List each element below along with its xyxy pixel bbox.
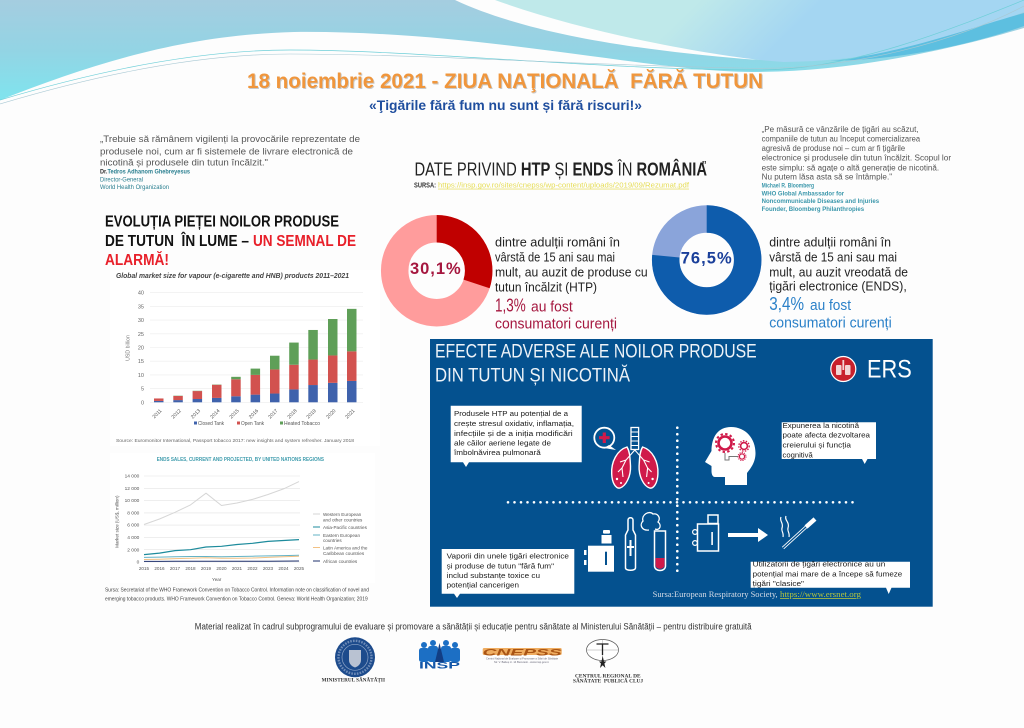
bar chart: global market size: 40 — [138, 291, 144, 297]
line chart: ENDS sales by region: 0 — [137, 560, 140, 566]
callout: HTP risks: crește stresul oxidativ, inflamația, — [454, 419, 574, 428]
text: HTP statistic: au fost — [531, 300, 573, 316]
line chart: ENDS sales by region: 2022 — [247, 566, 258, 571]
line chart: ENDS sales by region: 2020 — [216, 566, 227, 571]
quote: Tedros Ghebreyesus: produsele noi, cum ar fi sistemele de livrare electronică de — [100, 146, 353, 158]
callout: nicotine and the brain: cognitivă — [782, 450, 814, 459]
callout: HTP risks: infecțiile și de a iniția modificări — [454, 429, 573, 438]
text: HTP statistic: vârstă de 15 ani sau mai — [495, 249, 615, 264]
quote: Michael Bloomberg: este simplu: să agațe o altă generație de nicotină. — [762, 163, 939, 172]
line chart: ENDS sales by region: 2025 — [294, 566, 305, 571]
callout: HTP risks: Produsele HTP au potențial de a — [454, 409, 569, 418]
line chart: ENDS sales by region: 2021 — [232, 566, 243, 571]
bar chart: global market size: Closed Tank — [198, 421, 224, 427]
heading: market evolution: EVOLUȚIA PIEȚEI NOILOR PRODUSE — [105, 214, 339, 231]
quote: Michael Bloomberg — [762, 125, 952, 213]
subtitle: «Ţigările fără fum nu sunt și fără riscuri!» — [369, 97, 642, 113]
text: HTP statistic: consumatori curenți — [495, 316, 617, 332]
heading: market evolution: UN SEMNAL DE — [253, 233, 356, 250]
callout: toxic vapours: și produse de tutun "fără fum" — [447, 561, 554, 570]
heading: market evolution: DE TUTUN ÎN LUME – — [105, 232, 249, 250]
bar chart: global market size: Open Tank — [241, 421, 264, 427]
dotted dividers — [508, 428, 853, 575]
source line: https://www.ersnet.org — [780, 590, 861, 599]
quote: Michael Bloomberg: agresivă de produse noi – cum ar fi țigările — [762, 144, 905, 153]
line chart: ENDS sales by region: ENDS SALES, CURRENT AND PROJECTED, BY UNITED NATIONS REGIONS — [157, 457, 324, 463]
icon: e-cigarette leads to cigarette — [693, 515, 815, 551]
callout: toxic vapours: potențial cancerigen — [447, 581, 519, 590]
line chart: ENDS sales by region: 2023 — [263, 566, 274, 571]
chart source note: Sursa: Secretariat of the WHO Framework Convention on Tobacco Control. Information note on classification of novel and — [105, 588, 369, 594]
bar chart: global market size: 2013 — [190, 408, 202, 420]
callout: progression to classic cigarettes: țigări "clasice" — [753, 579, 804, 588]
quote: Michael Bloomberg: Michael R. Bloomberg — [762, 183, 814, 190]
line chart: ENDS sales by region: 2017 — [170, 566, 181, 571]
bar chart: global market size: 5 — [141, 387, 144, 393]
donut chart: HTP 30,1% — [395, 229, 479, 313]
text: HTP statistic: mult, au auzit de produse cu — [495, 265, 648, 280]
line chart: ENDS sales by region: African countries — [323, 559, 358, 564]
bar chart: global market size: 2011 — [152, 408, 164, 420]
quote: Michael Bloomberg: Noncommunicable Diseases and Injuries — [762, 198, 880, 205]
quote: Michael Bloomberg: companiile de tutun au început comercializarea — [762, 134, 921, 144]
bar chart: global market size: 20 — [138, 346, 144, 352]
logo: Ministerul Sanatatii — [322, 637, 385, 684]
header wave decoration — [0, 0, 1024, 104]
ERS logo: ERS — [867, 355, 912, 383]
line chart: ENDS sales by region: Market size (US$, million) — [114, 495, 120, 548]
line chart: ENDS sales by region: 12 000 — [125, 486, 140, 492]
ERS logo — [831, 355, 912, 383]
callout: toxic vapours — [442, 549, 574, 598]
donut chart: ENDS 76,5% — [666, 219, 748, 301]
bar chart: global market size: 2016 — [248, 408, 260, 420]
logo: CNEPSS: Str. V. Babeș nr. 14 Bucuresti - www.insp.gov.ro — [494, 660, 550, 664]
chart source note: emerging tobacco products. WHO Framework Convention on Tobacco Control. Geneva: World Health Organization; 2019 — [105, 596, 368, 602]
line chart: ENDS sales by region: 14 000 — [125, 474, 140, 480]
heading: market evolution: ALARMĂ! — [105, 252, 169, 269]
heading: Romania data: ” — [702, 158, 706, 173]
bar chart: global market size: 0 — [141, 400, 144, 406]
quote: Tedros Ghebreyesus: Director-General — [100, 177, 143, 183]
callout: nicotine and the brain — [782, 421, 876, 464]
bar chart: global market size: 30 — [138, 318, 144, 324]
heading: Romania data: DATE PRIVIND HTP ȘI ENDS ÎN ROMÂNIA — [414, 159, 707, 180]
callout: nicotine and the brain: Expunerea la nicotină — [782, 421, 860, 430]
line chart: ENDS sales by region: Asia-Pacific countries — [323, 525, 368, 530]
text: HTP statistic: tutun încălzit (HTP) — [495, 279, 597, 294]
heading: Romania data — [414, 158, 707, 190]
title: 18 noiembrie 2021 - ZIUA NAŢIONALĂ FĂRĂ TUTUN — [248, 71, 764, 94]
text: HTP statistic: 1,3% — [495, 296, 526, 316]
heading: Romania data: https://insp.gov.ro/sites/cnepss/wp-content/uploads/2019/09/Rezumat.pdf — [438, 183, 689, 190]
quote: Michael Bloomberg: electronice și produsele din tutun încălzit. Scopul lor — [762, 154, 952, 163]
callout: nicotine and the brain: creierului și funcția — [782, 441, 852, 450]
callout: progression to classic cigarettes: potențial mai mare de a începe să fumeze — [753, 569, 902, 578]
text: ENDS statistic: au fost — [810, 298, 851, 314]
callout: toxic vapours: includ substanțe toxice cu — [447, 571, 540, 580]
bar chart: global market size: Global market size for vapour (e-cigarette and HNB) products 2011–2021 — [116, 271, 349, 280]
line chart: ENDS sales by region: 2 000 — [127, 547, 140, 553]
callout: nicotine and the brain: poate afecta dezvoltarea — [782, 431, 871, 440]
bar chart: global market size: 15 — [138, 359, 144, 365]
source line: Sursa:European Respiratory Society, — [653, 590, 778, 599]
line chart: ENDS sales by region: 2015 — [139, 566, 150, 571]
icon: e-cigarette devices and test tube — [584, 513, 666, 572]
line chart: ENDS sales by region: Latin America and the — [323, 546, 368, 550]
bar chart: global market size: 2021 — [344, 408, 357, 420]
text: ENDS statistic: mult, au auzit vreodată de — [769, 265, 908, 280]
line chart: ENDS sales by region: Western European — [323, 512, 362, 517]
logo: CNEPSS: Centrul Național de Evaluare și Promovare a Stării de Sănătate — [486, 656, 559, 660]
footer note: Material realizat în cadrul subprogramului de evaluare și promovare a sănătății și educație pentru sănătate al Ministerului Sănătății – pentru distribuire gratuită — [195, 622, 752, 632]
text: ENDS statistic: vârstă de 15 ani sau mai — [769, 249, 897, 264]
line chart: ENDS sales by region: 4 000 — [127, 535, 140, 541]
text: ENDS statistic: țigări electronice (ENDS), — [769, 279, 907, 294]
bar chart: global market size: 2012 — [171, 408, 183, 420]
donut chart: ENDS 76,5%: 76,5% — [681, 249, 732, 267]
bar chart: global market size — [110, 270, 380, 446]
chart source note — [105, 588, 369, 602]
callout: HTP risks — [451, 406, 582, 467]
line chart: ENDS sales by region: and other countries — [323, 518, 363, 522]
quote: Tedros Ghebreyesus: „Trebuie să rămânem vigilenți la provocările reprezentate de — [100, 134, 360, 145]
quote: Michael Bloomberg: „Pe măsură ce vânzările de țigări au scăzut, — [762, 125, 919, 134]
text: ENDS statistic: consumatori curenți — [769, 315, 892, 331]
logo: Centrul Regional Cluj — [573, 640, 644, 685]
panel heading: EFECTE ADVERSE ALE NOILOR PRODUSE — [435, 342, 757, 363]
heading: market evolution — [105, 214, 356, 269]
logo: Ministerul Sanatatii: MINISTERUL SĂNĂTĂȚII — [322, 678, 385, 684]
logo: CNEPSS: CNEPSS — [483, 647, 563, 658]
callout: HTP risks: îmbolnăvirea pulmonară — [453, 448, 542, 457]
logo: INSP — [419, 640, 460, 670]
bar chart: global market size: 25 — [138, 332, 144, 338]
callout: toxic vapours: Vaporii din unele țigări electronice — [447, 552, 569, 561]
line chart: ENDS sales by region: 6 000 — [127, 523, 140, 529]
line chart: ENDS sales by region: 2024 — [278, 566, 289, 571]
line chart: ENDS sales by region: 2019 — [201, 566, 212, 571]
bar chart: global market size: 2020 — [325, 408, 338, 420]
text: HTP statistic — [495, 235, 648, 332]
line chart: ENDS sales by region: countries — [323, 538, 342, 543]
line chart: ENDS sales by region: Eastern European — [323, 533, 360, 538]
line chart: ENDS sales by region: Year — [212, 577, 222, 582]
logo: CNEPSS — [483, 647, 563, 664]
bar chart: global market size: Heated Tobacco — [284, 421, 320, 427]
text: ENDS statistic: 3,4% — [769, 294, 804, 314]
callout: progression to classic cigarettes: Utilizatorii de țigări electronice au un — [753, 560, 885, 569]
bar chart: global market size: 2014 — [209, 408, 222, 420]
bar chart: global market size: 2017 — [267, 408, 280, 420]
quote: Michael Bloomberg: WHO Global Ambassador for — [762, 190, 845, 197]
icon: lungs — [594, 428, 658, 488]
bar chart: global market size: 2015 — [229, 408, 241, 420]
donut chart: HTP 30,1%: 30,1% — [410, 260, 461, 278]
bar chart: global market size: USD billion — [126, 335, 132, 361]
quote: Tedros Ghebreyesus: nicotină și produsele din tutun încălzit." — [100, 158, 268, 169]
line chart: ENDS sales by region: 2016 — [154, 566, 165, 571]
title: 18 noiembrie 2021 - ZIUA NAŢIONALĂ FĂRĂ TUTUN — [247, 70, 763, 93]
bar chart: global market size: 10 — [138, 373, 144, 379]
callout: progression to classic cigarettes — [751, 560, 910, 594]
line chart: ENDS sales by region: Caribbean countries — [323, 551, 365, 556]
source line — [653, 590, 861, 599]
logo: Centrul Regional Cluj: SĂNĂTATE PUBLICĂ CLUJ — [573, 679, 644, 685]
quote: Tedros Ghebreyesus — [100, 134, 360, 191]
quote: Tedros Ghebreyesus: World Health Organization — [100, 185, 169, 191]
panel heading: DIN TUTUN ȘI NICOTINĂ — [435, 366, 630, 387]
heading: Romania data: SURSA: — [414, 183, 436, 190]
line chart: ENDS sales by region — [110, 453, 375, 583]
line chart: ENDS sales by region: 8 000 — [127, 510, 140, 516]
icon: head with gears — [705, 427, 756, 485]
panel: adverse effects — [430, 339, 933, 607]
logo: Centrul Regional Cluj: CENTRUL REGIONAL DE — [575, 674, 641, 679]
text: ENDS statistic — [769, 235, 908, 331]
quote: Michael Bloomberg: Nu putem lăsa asta să se întâmple." — [762, 173, 892, 182]
quote: Michael Bloomberg: Founder, Bloomberg Philanthropies — [762, 206, 865, 213]
text: ENDS statistic: dintre adulții români în — [769, 235, 891, 250]
bar chart: global market size: 35 — [138, 304, 144, 310]
panel heading — [435, 342, 757, 387]
line chart: ENDS sales by region: 2018 — [185, 566, 196, 571]
text: HTP statistic: dintre adulții români în — [495, 235, 620, 250]
bar chart: global market size: Source: Euromonitor International, Passport tobacco 2017: new insights and system refresher. January 2018 — [116, 438, 354, 444]
quote: Tedros Ghebreyesus: Dr.Tedros Adhanom Ghebreyesus — [100, 169, 190, 176]
bar chart: global market size: 2019 — [306, 408, 318, 420]
logo: INSP: INSP — [419, 660, 460, 670]
bar chart: global market size: 2018 — [287, 408, 299, 420]
callout: HTP risks: ale căilor aeriene legate de — [454, 439, 551, 448]
line chart: ENDS sales by region: 10 000 — [125, 498, 140, 504]
